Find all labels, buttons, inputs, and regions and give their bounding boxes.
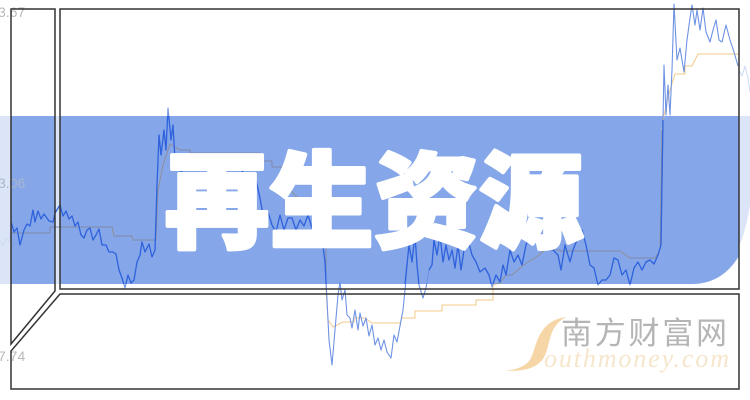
watermark: southmoney logo: outhmoney.com [544, 344, 729, 373]
blue band inside frame [11, 116, 739, 284]
watermark: southmoney logo: 南方财富网 [561, 308, 727, 353]
axis labels [0, 4, 25, 364]
moving average line [11, 54, 750, 327]
light background band [0, 116, 750, 284]
watermark: southmoney logo [506, 308, 729, 373]
title: 再生资源 [165, 146, 583, 262]
